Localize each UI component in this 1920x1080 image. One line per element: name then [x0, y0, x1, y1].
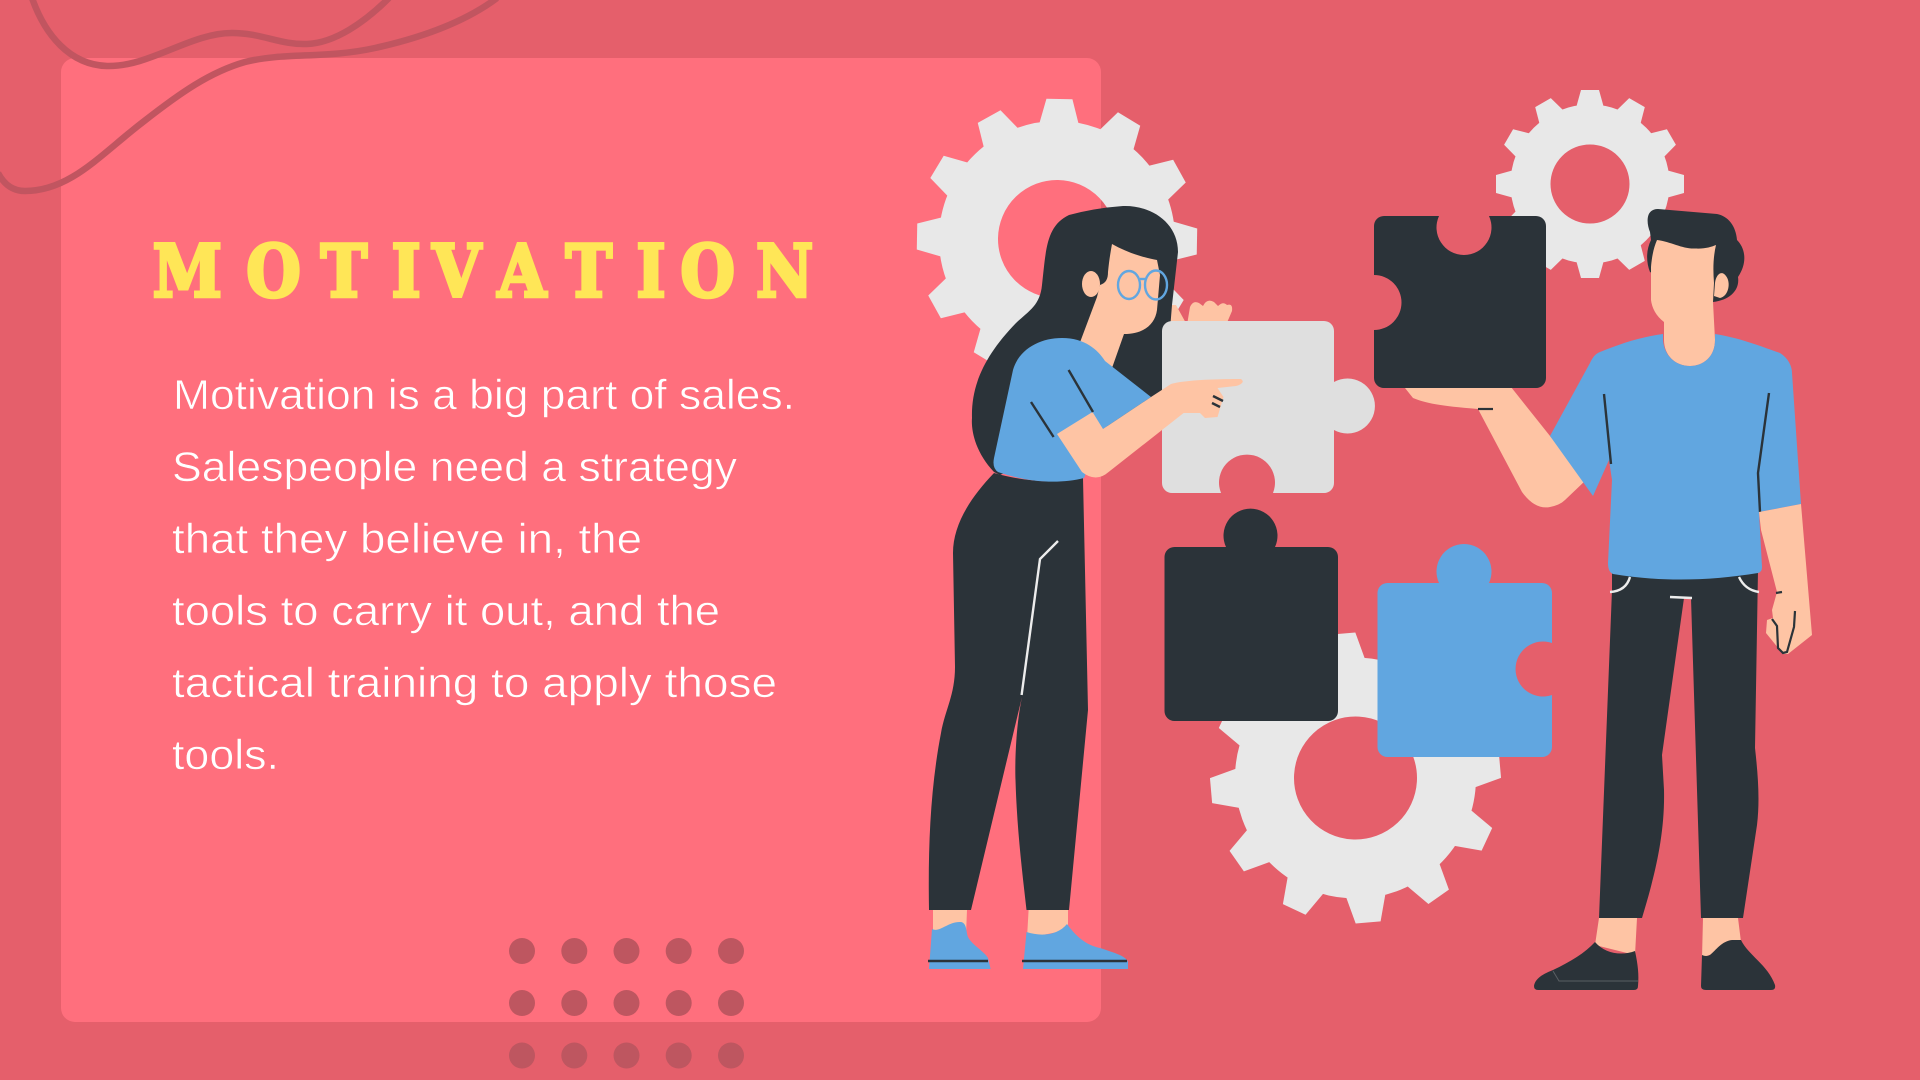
man left shoe	[1534, 942, 1638, 990]
woman ear	[1082, 271, 1100, 297]
man back hair	[1647, 209, 1744, 302]
man trousers	[1599, 570, 1758, 918]
panel: text card	[61, 58, 1101, 1022]
puzzle piece: dark top right	[1374, 216, 1546, 388]
body text: Salespeople need a strategy	[172, 443, 737, 490]
woman garment and finger lines	[1031, 370, 1223, 437]
man ear	[1714, 273, 1729, 298]
body text: Motivation is a big part of sales.	[173, 371, 795, 418]
man lower arm and fist	[1759, 504, 1812, 654]
woman fingers behind puzzle	[1170, 301, 1232, 325]
woman right shoe	[1023, 924, 1128, 969]
puzzle piece: dark bottom	[1164, 509, 1338, 721]
decorative curves	[0, 0, 497, 191]
man shirt	[1550, 334, 1801, 580]
man right shoe	[1701, 940, 1775, 990]
man hand lines	[1772, 592, 1795, 653]
woman ankles	[933, 910, 1068, 938]
body text: that they believe in, the	[172, 515, 642, 562]
man palm	[1405, 387, 1586, 507]
gear: large top left	[915, 97, 1199, 381]
body text: tools to carry it out, and the	[172, 587, 720, 634]
man neck and face	[1651, 240, 1716, 366]
woman arm and pointing hand	[1057, 379, 1243, 478]
puzzle piece: light	[1162, 321, 1375, 493]
body text: tools.	[172, 731, 279, 778]
puzzle piece: blue	[1378, 544, 1552, 757]
woman trouser seam	[1022, 541, 1058, 695]
man wrist line	[1478, 408, 1493, 410]
person: woman	[928, 206, 1375, 969]
body text: tactical training to apply those	[172, 659, 777, 706]
gear: small top right	[1496, 90, 1684, 278]
body text	[172, 371, 795, 778]
shoe soles	[928, 960, 1127, 962]
woman left shoe	[929, 922, 991, 969]
woman trousers	[929, 473, 1088, 910]
man sleeve lines	[1604, 393, 1769, 512]
woman neck and face	[1079, 244, 1160, 368]
woman glasses	[1118, 270, 1167, 300]
man shoe seam	[1553, 971, 1638, 981]
man ankles	[1595, 918, 1741, 958]
gear: bottom	[1163, 585, 1548, 971]
title: MOTIVATION	[153, 229, 813, 314]
man trouser details	[1610, 577, 1759, 598]
person: man	[1374, 209, 1812, 990]
woman shirt	[994, 338, 1151, 482]
woman hair	[972, 206, 1178, 475]
dot grid	[509, 938, 744, 1068]
